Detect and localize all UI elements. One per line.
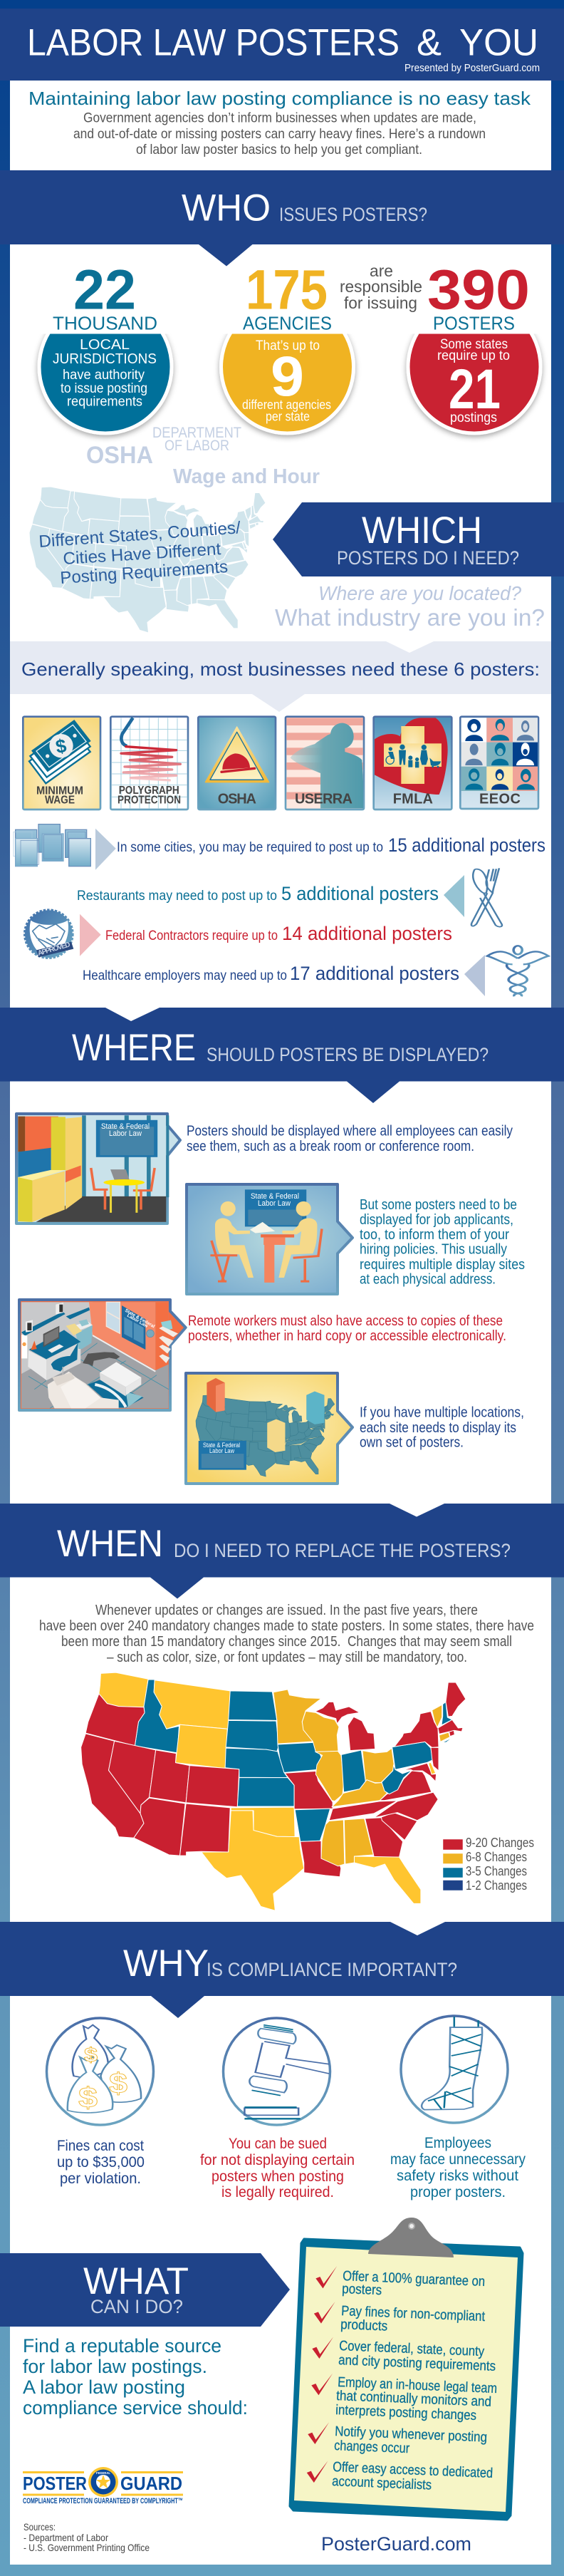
title: & [417,21,442,64]
text: remote workers: Remote workers must also have access to copies of these [188,1313,503,1329]
stat: 22 thousand [53,258,157,333]
row: healthcare [83,946,548,996]
icon: caduceus [487,946,548,996]
questions: What industry are you in? [275,604,545,631]
poster label: Labor Law [109,1129,142,1138]
text: fines [57,2137,145,2187]
icon: fork and spoon [471,868,502,927]
are responsible for issuing: responsible [340,277,422,296]
section band: why: WHY [123,1943,209,1985]
row: federal contractors: 14 additional posters [282,923,452,944]
text: job applicants: displayed for job applicants, [360,1212,513,1228]
icon: money bags: $ [84,2044,98,2066]
text: all employees [187,1123,513,1154]
poster tile: fmla: FMLA [393,792,433,807]
poster tile: eeoc: EEOC [479,792,521,807]
sources: Sources: [24,2521,56,2533]
section band: where: SHOULD POSTERS BE DISPLAYED? [207,1044,489,1065]
text: find a source: for labor law postings. [23,2356,207,2377]
icon: approved seal [25,910,73,958]
poster label: Labor Law [209,1447,234,1454]
text: fines: per violation. [60,2170,141,2187]
checklist: Employ an in-house legal team [338,2374,498,2396]
section band: why: IS COMPLIANCE IMPORTANT? [207,1959,457,1980]
banner: what: WHAT [83,2260,189,2302]
map caption [38,518,241,588]
checklist: that continually monitors and [336,2388,492,2410]
poster tile: polygraph protection: POLYGRAPH [119,785,179,797]
circle: local jurisdictions [34,333,177,440]
text: find a source: A labor law posting [23,2376,185,2398]
poster label [101,1122,150,1138]
are responsible for issuing: are [370,262,393,280]
stat: 175 agencies: 175 [246,258,328,321]
poster tile: minimum wage [23,717,100,809]
poster tile: fmla [374,717,451,809]
poster tile: userra [286,717,364,809]
poster label: Labor Law [126,1313,149,1329]
who heading: WHO [182,187,271,229]
intro text: and out-of-date or missing posters can carry heavy fines. Here’s a rundown [73,126,486,142]
map caption: Different States, Counties/ [38,518,241,552]
banner: which: WHICH [362,509,482,552]
section band: when [0,1504,564,1578]
poster label: State & Federal [251,1192,299,1201]
text: find a source [23,2335,248,2419]
row: healthcare: 17 additional posters [290,963,459,984]
panel: where content [10,1082,551,1504]
circle: up to 9 agencies: different agencies [242,397,331,412]
row: federal contractors: APPROVED [37,941,71,958]
arrow [444,875,464,917]
notch arrow: where [347,1082,400,1103]
circle: up to 9 agencies: per state [266,409,310,423]
notch arrow: why [151,1996,204,2018]
section band: where: WHERE [72,1027,196,1069]
banner: which [273,502,564,576]
text: job applicants: at each physical address. [360,1272,496,1288]
row: cities: 15 additional posters [388,834,545,856]
text: sued [200,2135,355,2200]
text: fines: up to $35,000 [57,2153,145,2171]
banner: which: POSTERS DO I NEED? [337,547,519,569]
circle: local jurisdictions: JURISDICTIONS [53,351,157,367]
circle: up to 21 postings: Some states [440,337,508,352]
poster label: Labor Law [258,1199,291,1208]
circle: up to 21 postings: postings [450,410,497,425]
panel: when content [10,1578,551,1922]
text: job applicants: hiring policies. This usually [360,1241,507,1257]
arrow [464,955,485,996]
row: cities [14,824,545,870]
logo: poster guard: FEDERAL [96,2471,110,2475]
text: employees: safety risks without [397,2167,518,2184]
circle: local jurisdictions: to issue posting [61,381,147,396]
agency names [86,425,320,488]
map caption: Cities Have Different [63,539,221,569]
scene: multiple locations [186,1373,352,1484]
agency names: Wage and Hour [173,465,320,488]
icon: money bags [47,2018,154,2125]
are responsible for issuing: for issuing [344,294,417,312]
logo: poster guard: POSTER [23,2473,87,2494]
row: healthcare: Healthcare employers may need up to [83,968,287,983]
checkmarks [307,2266,337,2483]
notch arrow: when [150,1578,204,1599]
circle: up to 9 agencies: That’s up to [256,338,320,353]
clipboard [290,2218,523,2520]
checklist: Offer a 100% guarantee on [343,2268,486,2290]
stat: 22 thousand: THOUSAND [53,314,157,333]
section band: why [0,1922,564,1996]
text: fines: Fines can cost [57,2137,144,2154]
panel: why and what content [10,1996,551,2565]
section band: who [0,170,564,244]
text: multiple locations: If you have multiple locations, [360,1405,524,1421]
checklist: Cover federal, state, county [339,2338,485,2359]
poster tile: osha: OSHA [218,792,256,807]
scene: remote workers [19,1300,186,1410]
band: six posters: Generally speaking, most businesses need these 6 posters: [21,658,540,680]
checklist: Notify you whenever posting [335,2424,488,2446]
sources [24,2521,150,2553]
checklist: changes occur [334,2438,410,2456]
checklist: and city posting requirements [338,2352,496,2374]
text: job applicants [360,1197,525,1288]
logo: poster guard: GUARD [120,2473,182,2494]
stat: 390 posters: 390 [427,258,530,321]
logo: poster guard [23,2467,183,2505]
circle: up to 9 agencies [216,333,359,440]
text: all employees: see them, such as a break room or conference room. [187,1139,474,1154]
checklist [332,2268,498,2493]
intro text: Government agencies don’t inform businesses when updates are made, [83,110,476,125]
panel: intro [10,81,551,170]
text: sued: for not displaying certain [200,2151,355,2168]
checklist: products [340,2317,388,2334]
poster label: State & Federal [203,1442,240,1449]
header band [0,9,564,81]
legend: 3-5 Changes [466,1864,527,1878]
text: employees: Employees [424,2134,491,2151]
poster label: State & Federal [101,1122,150,1131]
circle: local jurisdictions: LOCAL [80,336,130,353]
intro heading: Maintaining labor law posting compliance is no easy task [28,88,531,109]
circle: up to 21 postings: 21 [449,357,501,420]
text: find a source: Find a reputable source [23,2335,221,2357]
checklist: account specialists [332,2473,432,2493]
text: multiple locations: own set of posters. [360,1435,464,1451]
legend: 1-2 Changes [466,1878,527,1893]
sources: - U.S. Government Printing Office [24,2542,150,2553]
text: when paragraph: – such as color, size, or font updates – may still be mandatory, too. [107,1650,467,1665]
row: cities: In some cities, you may be required to post up to [117,840,383,855]
row: restaurants: 5 additional posters [281,883,439,904]
poster tile: polygraph protection: PROTECTION [118,794,181,806]
section band: when: DO I NEED TO REPLACE THE POSTERS? [174,1540,511,1561]
text: when paragraph: Whenever updates or changes are issued. In the past five years, there [95,1603,478,1618]
presented by: Presented by PosterGuard.com [404,63,540,74]
text: multiple locations: each site needs to display its [360,1420,516,1436]
icon: money bags: $ [109,2068,127,2099]
checklist: Pay fines for non-compliant [341,2303,486,2324]
banner: what [0,2253,290,2327]
text: remote workers: posters, whether in hard copy or accessible electronically. [188,1328,506,1344]
agency names: OF LABOR [164,438,229,454]
text: remote workers [188,1313,506,1344]
text: employees [390,2134,526,2200]
poster tile: userra: USERRA [295,792,352,807]
section band: when: WHEN [57,1523,163,1565]
panel: main white column who and which [10,244,551,1008]
scene: job applicants [187,1184,352,1294]
arrow [95,829,116,870]
poster tile: polygraph protection [110,717,188,809]
section band: where [0,1008,564,1082]
poster label: State & Federal [124,1308,156,1329]
text: sued: You can be sued [229,2135,327,2152]
are responsible for issuing [340,262,422,312]
poster tile: minimum wage: WAGE [45,795,75,807]
text: employees: proper posters. [410,2183,506,2200]
poster tile: minimum wage: $ [54,735,68,757]
questions [275,582,545,631]
text: find a source: compliance service should: [23,2397,248,2419]
poster label [203,1442,240,1454]
band: six posters [10,641,551,712]
map: changes by state [81,1672,466,1910]
questions: Where are you located? [318,582,521,604]
circle: up to 9 agencies: 9 [271,344,304,408]
map: us outline with varied requirements [29,487,266,633]
banner: what: CAN I DO? [90,2296,183,2317]
text: sued: posters when posting [212,2168,344,2185]
text: employees: may face unnecessary [390,2151,526,2168]
checklist: interprets posting changes [335,2402,477,2424]
circle: up to 21 postings: require up to [437,348,510,363]
row: federal contractors [25,910,452,958]
poster tile: eeoc [460,717,538,809]
title: LABOR LAW POSTERS [27,21,400,64]
legend: 6-8 Changes [466,1850,527,1864]
title: YOU [459,21,538,64]
arrow [80,914,101,956]
who subheading: ISSUES POSTERS? [279,204,427,225]
circle: up to 21 postings [403,333,545,440]
notch arrow: who [199,244,252,267]
sources: - Department of Labor [24,2532,108,2543]
poster label [251,1192,299,1208]
text: job applicants: requires multiple display sites [360,1257,525,1273]
text: job applicants: But some posters need to be [360,1197,517,1213]
intro text [73,110,486,157]
row: restaurants [77,868,502,927]
agency names: OSHA [86,442,153,469]
logo: poster guard: COMPLIANCE PROTECTION GUARANTEED BY COMPLYRIGHT™ [23,2497,183,2505]
icon: leg cast [401,2016,508,2123]
legend [443,1836,534,1893]
agency names: DEPARTMENT [152,425,241,441]
stat: 175 agencies: AGENCIES [243,314,332,333]
clip [368,2218,454,2257]
checklist: posters [342,2281,382,2298]
circle: local jurisdictions: have authority [63,368,145,383]
scene: break room [16,1114,180,1224]
text: all employees: Posters should be displayed where all employees can easily [187,1123,513,1139]
icon: buildings [14,824,90,867]
text: sued: is legally required. [221,2183,334,2200]
text: multiple locations [360,1405,524,1451]
text: when paragraph [39,1603,534,1665]
circle: local jurisdictions: requirements [67,395,142,409]
poster tile: osha [198,717,276,809]
icon: money bags: $ [78,2082,98,2114]
stat: 22 thousand: 22 [73,258,136,321]
row: federal contractors: Federal Contractors require up to [105,929,278,943]
icon: gavel [224,2018,330,2125]
row: restaurants: Restaurants may need to post up to [77,889,277,904]
intro text: of labor law poster basics to help you get compliant. [136,142,422,157]
stat: 390 posters: POSTERS [433,314,515,333]
map caption: Posting Requirements [60,557,229,588]
poster tile: minimum wage: MINIMUM [36,785,83,797]
text: job applicants: too, to inform them of your [360,1227,509,1243]
website: PosterGuard.com [321,2533,471,2555]
checklist: Offer easy access to dedicated [333,2459,494,2481]
legend: 9-20 Changes [466,1836,534,1850]
